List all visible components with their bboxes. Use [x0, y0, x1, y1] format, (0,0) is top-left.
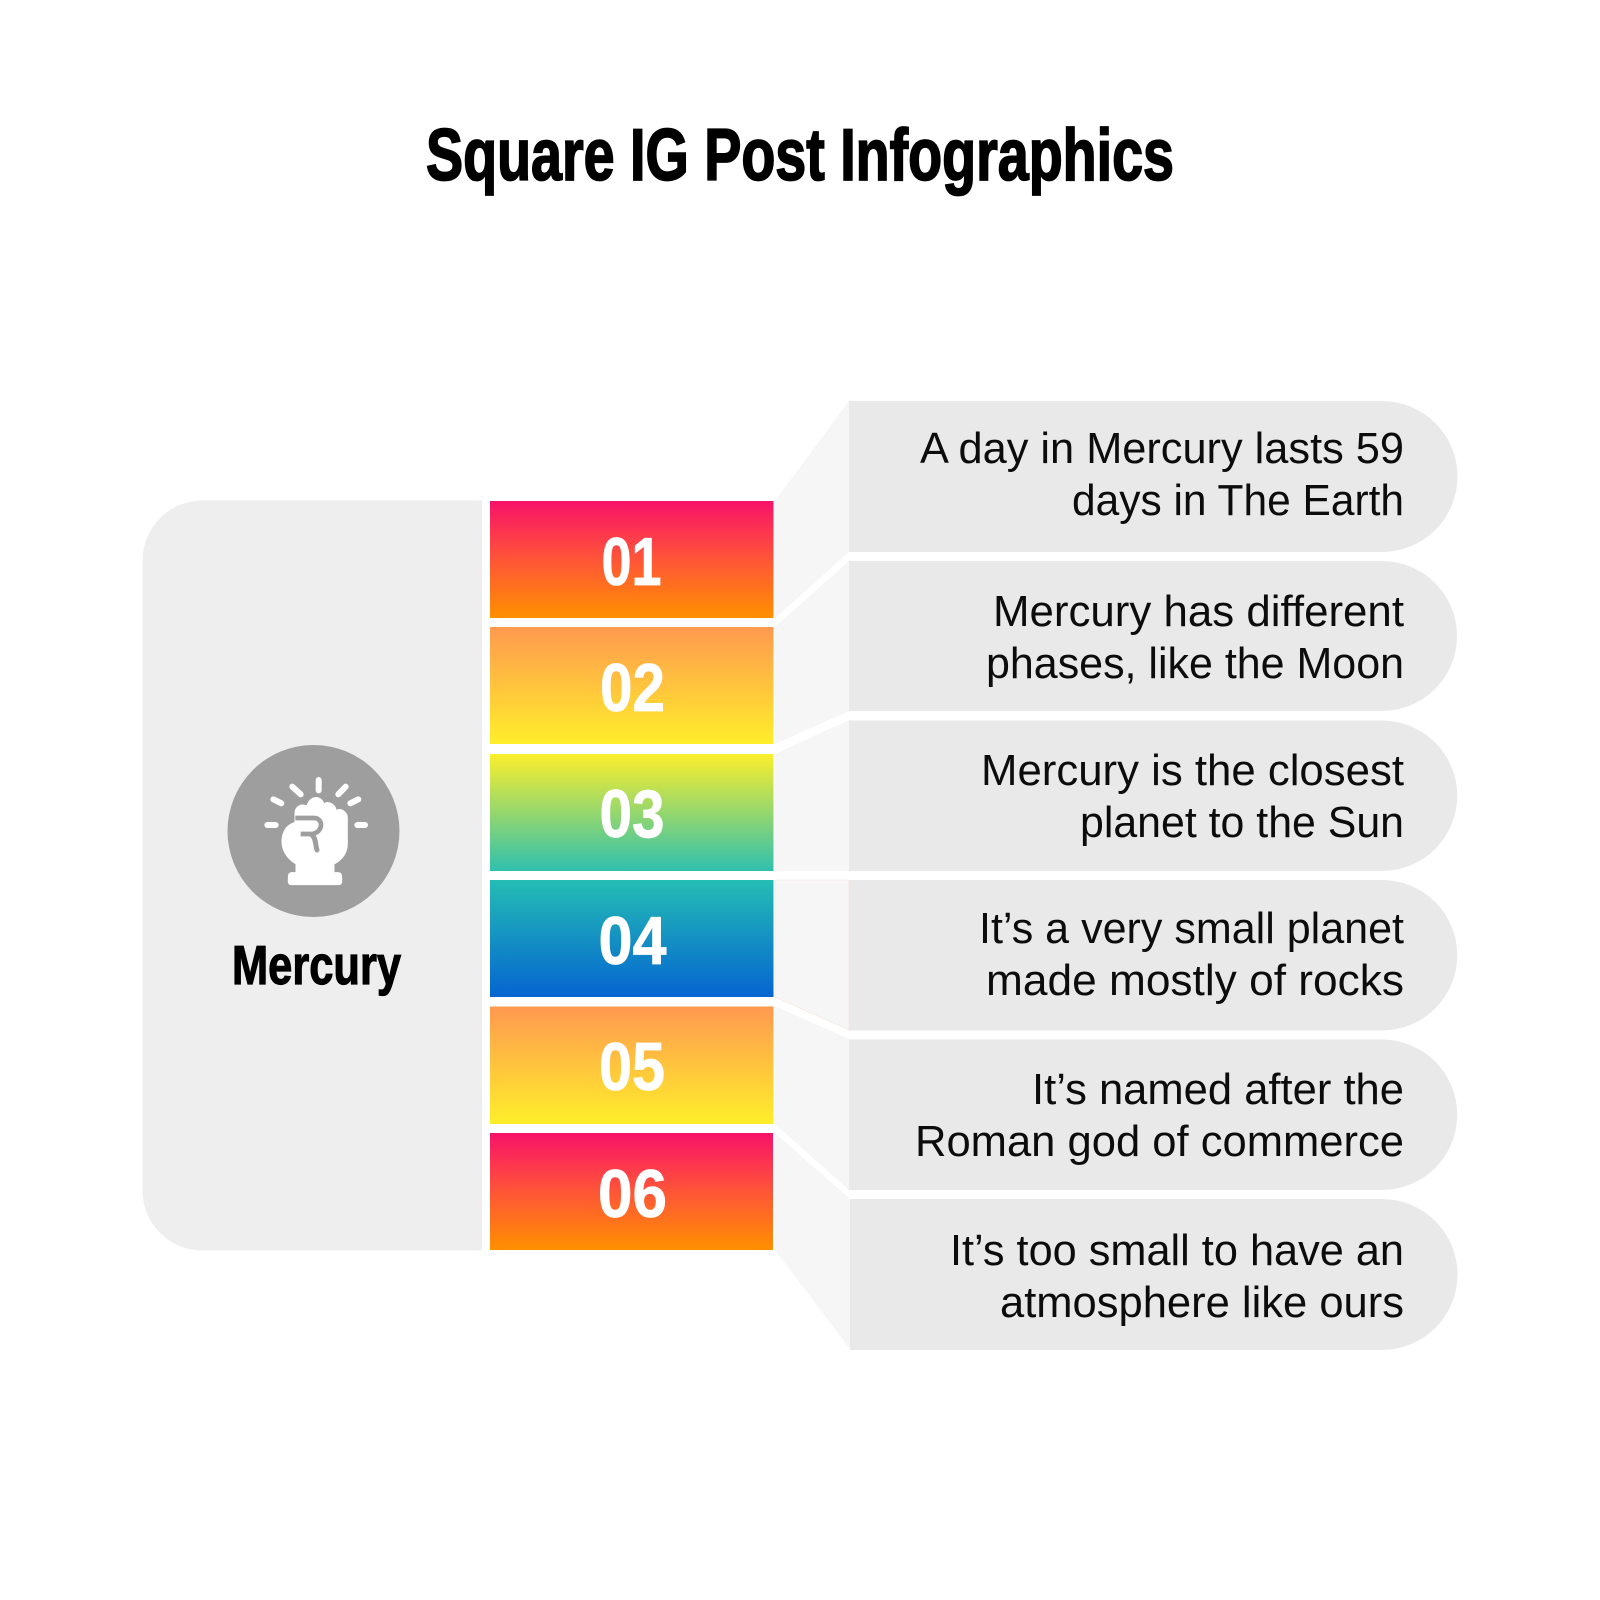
fact 1 pill: [849, 401, 1458, 552]
fact 6 pill: atmosphere like ours: [1000, 1278, 1404, 1327]
step 04 bar: [490, 880, 774, 997]
step 05 bar: 05: [599, 1029, 665, 1105]
fact 6 pill: It’s too small to have an: [950, 1226, 1404, 1275]
panel: Mercury: [142, 500, 482, 1251]
connector 2: [775, 561, 849, 744]
fact 3 pill: Mercury is the closest: [981, 746, 1404, 795]
fact 5 pill: [849, 1040, 1457, 1190]
step 02 bar: [490, 627, 774, 744]
step 04 bar: 04: [598, 903, 667, 979]
icon: raised fist in circle: [228, 745, 400, 917]
fact 3 pill: [849, 720, 1457, 871]
step 01 bar: [490, 501, 774, 618]
step 06 bar: 06: [598, 1156, 667, 1232]
step 03 bar: 03: [600, 776, 664, 852]
connector 5: [775, 1006, 849, 1190]
fact 3 pill: planet to the Sun: [1080, 798, 1404, 847]
connector 3: [775, 720, 849, 871]
fact 6 pill: [850, 1199, 1458, 1350]
fact 1 pill: days in The Earth: [1072, 476, 1404, 525]
step 03 bar: [490, 754, 774, 871]
fact 2 pill: phases, like the Moon: [986, 639, 1404, 688]
fact 5 pill: It’s named after the: [1032, 1065, 1404, 1114]
step 05 bar: [490, 1006, 774, 1124]
fact 4 pill: It’s a very small planet: [979, 904, 1404, 953]
fact 2 pill: [849, 561, 1457, 711]
connector 6: [775, 1133, 850, 1349]
title: Square IG Post Infographics: [426, 115, 1174, 196]
panel heading: Mercury: Mercury: [232, 934, 401, 996]
fact 2 pill: Mercury has different: [993, 587, 1404, 636]
connector 1: [775, 401, 849, 618]
step 06 bar: [490, 1133, 773, 1250]
connector 4: [775, 880, 849, 1030]
fact 4 pill: [849, 880, 1457, 1030]
fact 1 pill: A day in Mercury lasts 59: [920, 424, 1404, 473]
step 01 bar: 01: [602, 524, 662, 600]
fact 4 pill: made mostly of rocks: [986, 956, 1404, 1005]
step 02 bar: 02: [600, 650, 665, 726]
fact 5 pill: Roman god of commerce: [915, 1117, 1404, 1166]
